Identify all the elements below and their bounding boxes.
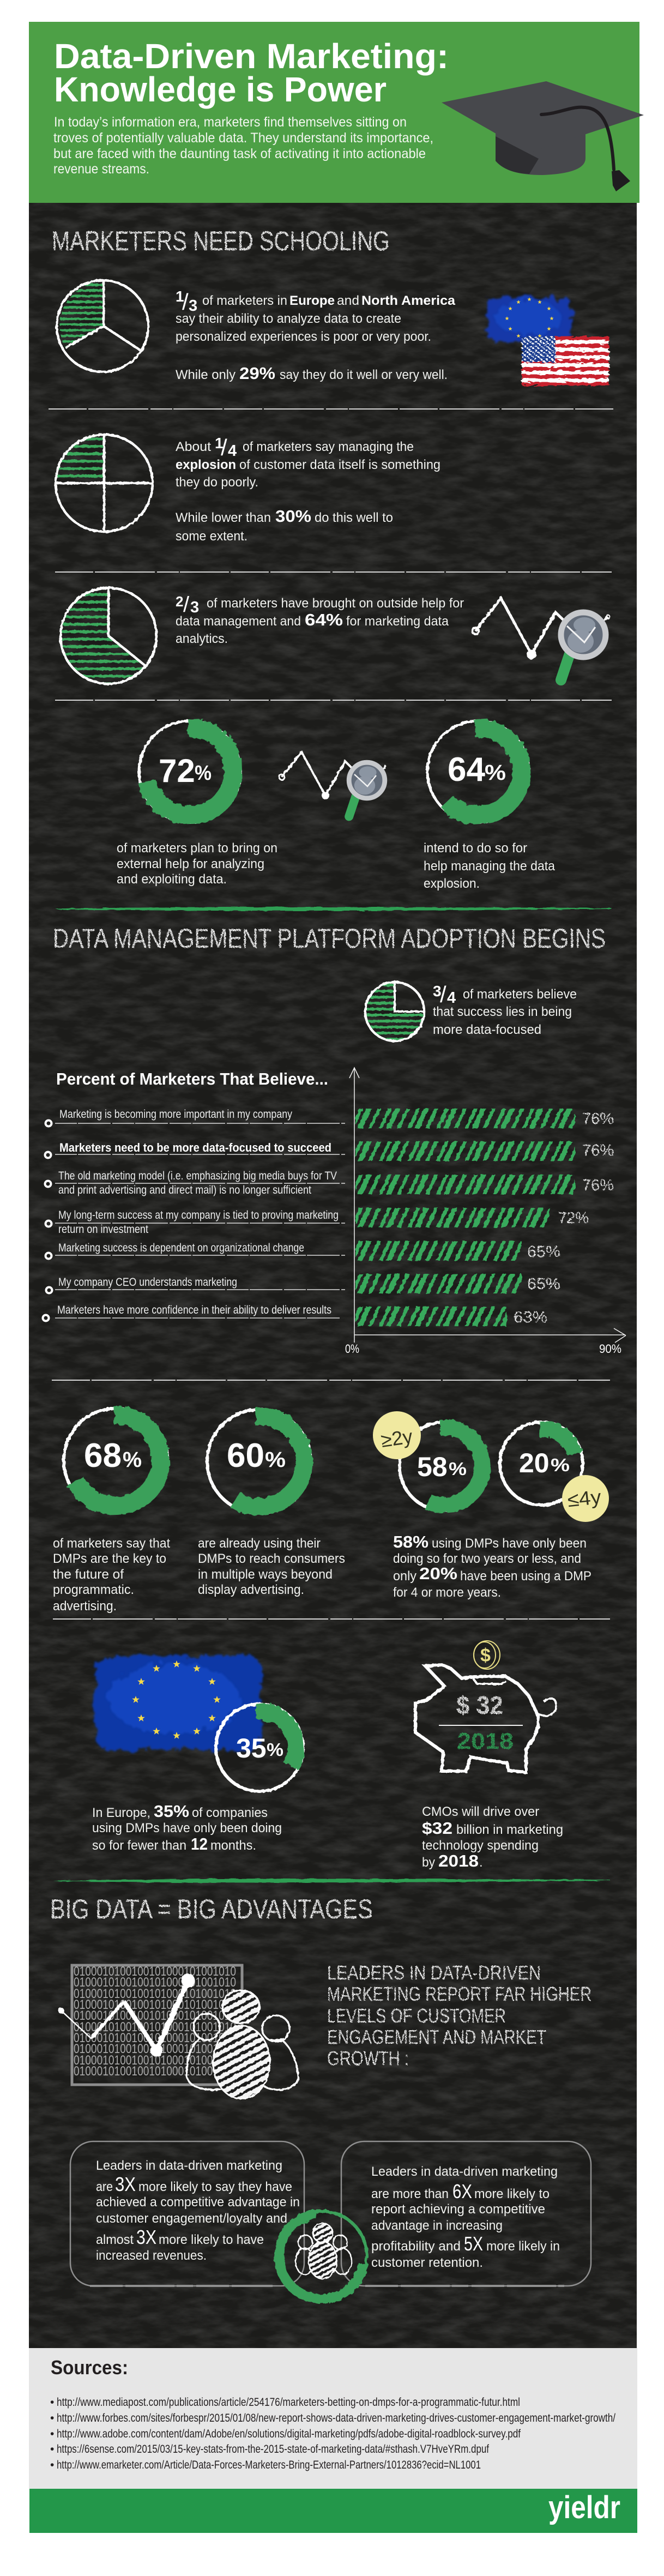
caption: 72 percent: and exploiting data. — [117, 872, 227, 887]
badge: two years — [373, 1411, 421, 1459]
row: old marketing model: The old marketing model (i.e. emphasizing big media buys for TV — [58, 1170, 337, 1182]
caption: CMOs spending — [422, 1804, 563, 1870]
caption: 58 and 20 percent: 20% — [419, 1564, 457, 1583]
axes: 90% — [599, 1342, 621, 1356]
text block: two thirds of marketers: 64% — [305, 610, 343, 629]
caption: Europe 35 percent: 35% — [154, 1802, 189, 1821]
text block: three quarters: that success lies in being — [433, 1004, 572, 1019]
donut: 72 percent — [139, 721, 240, 822]
fraction 1/4: 1 — [215, 435, 224, 452]
text block: one third of marketers: Europe — [289, 293, 335, 308]
row: marketing more important: 76% — [582, 1110, 614, 1128]
row: data focused: Marketers need to be more data-focused to succeed — [59, 1141, 331, 1154]
logo: yieldr: yieldr — [548, 2490, 620, 2525]
row: long-term success: 72% — [558, 1209, 589, 1227]
source list — [50, 2396, 615, 2471]
value: 35 — [236, 1733, 267, 1764]
text block: two thirds of marketers: for marketing data — [346, 614, 449, 629]
caption: 68 percent: the future of — [53, 1567, 124, 1582]
text block: one quarter of marketers: of marketers say managing the — [243, 440, 414, 454]
source list: • — [50, 2443, 54, 2455]
left box text: more likely to have — [159, 2232, 264, 2247]
badge: four years: ≤4y — [566, 1485, 602, 1511]
value: % — [195, 762, 212, 785]
donut: 64 percent — [427, 721, 529, 822]
caption: CMOs spending: CMOs will drive over — [422, 1804, 539, 1819]
text block: one third of marketers: personalized experiences is poor or very poor. — [176, 329, 431, 344]
intro text — [53, 115, 433, 177]
data board — [72, 1964, 242, 2085]
heading: marketers need schooling: MARKETERS NEED SCHOOLING — [52, 226, 390, 256]
donut: 20 percent — [500, 1422, 609, 1522]
row: old marketing model: and print advertising and direct mail) is no longer sufficient — [58, 1184, 311, 1196]
intro text: but are faced with the daunting task of activating it into actionable — [53, 146, 426, 161]
text block: one third of marketers: North America — [361, 293, 456, 308]
donut: 58 percent — [373, 1411, 488, 1510]
caption: 58 and 20 percent: only — [393, 1569, 416, 1584]
left box text: almost — [96, 2232, 134, 2247]
text block: two thirds of marketers: of marketers have brought on outside help for — [207, 596, 464, 611]
callout heading: leaders report: GROWTH : — [327, 2047, 409, 2069]
caption: 64 percent: help managing the data — [424, 859, 556, 874]
text block: one third of marketers: say their ability to analyze data to create — [176, 311, 401, 326]
caption: CMOs spending: 2018 — [438, 1851, 479, 1870]
footer — [29, 2489, 637, 2533]
row: more confidence: 63% — [514, 1309, 547, 1326]
icon: piggy bank — [415, 1641, 556, 1772]
callout heading: leaders report: LEVELS OF CUSTOMER — [327, 2005, 506, 2027]
caption: Europe 35 percent: 12 — [191, 1834, 208, 1853]
row: marketing more important — [46, 1108, 614, 1128]
row: long-term success: return on investment — [58, 1223, 148, 1236]
left box text: customer engagement/loyalty and — [96, 2211, 287, 2226]
value: 58 — [417, 1452, 448, 1482]
badge: four years — [562, 1475, 609, 1522]
source list: • — [50, 2396, 54, 2409]
badge: two years: ≥2y — [379, 1425, 414, 1452]
callout heading: leaders report: LEADERS IN DATA-DRIVEN — [327, 1961, 541, 1984]
intro text: troves of potentially valuable data. They understand its importance, — [53, 130, 433, 146]
value: % — [123, 1448, 142, 1472]
text block: one third of marketers: of marketers in — [202, 293, 287, 308]
caption: 60 percent: DMPs to reach consumers — [198, 1551, 345, 1566]
panel: right advantage box — [341, 2141, 591, 2286]
chalkboard background — [29, 203, 637, 2348]
value: 68 — [84, 1437, 122, 1474]
pie chart: three quarters — [363, 980, 427, 1044]
text block: one third of marketers: say they do it well or very well. — [280, 368, 448, 382]
text block: two thirds of marketers: analytics. — [176, 631, 228, 646]
fraction 2/3: 3 — [190, 599, 199, 616]
right box text: report achieving a competitive — [371, 2202, 545, 2217]
row: marketing more important: Marketing is becoming more important in my company — [59, 1108, 292, 1121]
intro text: revenue streams. — [53, 161, 149, 177]
pie chart: two thirds — [57, 586, 156, 687]
bar chart: percent of marketers that believe — [43, 1068, 626, 1356]
caption: 60 percent: in multiple ways beyond — [198, 1567, 333, 1582]
icon: small line chart with magnifier — [279, 752, 386, 816]
icon: coin — [474, 1641, 500, 1669]
icon: graduation cap — [442, 81, 644, 191]
caption: CMOs spending: $32 — [422, 1819, 452, 1838]
text block: one quarter of marketers: About — [176, 440, 211, 454]
source list: • — [50, 2459, 54, 2471]
caption: 58 and 20 percent: doing so for two years or less, and — [393, 1551, 581, 1566]
caption: CMOs spending: by — [422, 1855, 435, 1870]
panel: sources — [29, 2348, 637, 2489]
caption: 60 percent: display advertising. — [198, 1582, 304, 1597]
title: Knowledge is Power — [54, 70, 387, 109]
text block: one quarter of marketers: explosion — [176, 458, 236, 472]
fraction 3/4: 3 — [433, 983, 442, 1000]
fraction 1/3: 1 — [176, 288, 184, 305]
fraction 1/3: / — [182, 289, 189, 315]
axes: 0% — [345, 1342, 359, 1356]
right box text: advantage in increasing — [371, 2218, 503, 2233]
row: more confidence: Marketers have more confidence in their ability to deliver results — [57, 1304, 331, 1316]
sources heading: Sources: — [51, 2356, 128, 2379]
caption: 72 percent — [117, 841, 277, 887]
left box text — [96, 2158, 300, 2263]
caption: Europe 35 percent — [92, 1802, 282, 1853]
source list: http://www.emarketer.com/Article/Data-Forces-Marketers-Bring-External-Partners/1012836?ecid=NL1001 — [57, 2459, 481, 2471]
pig year: 2018 — [457, 1728, 514, 1754]
caption: Europe 35 percent: so for fewer than — [92, 1838, 186, 1853]
right box text: 6X — [452, 2180, 472, 2202]
illustration: data board and people — [58, 1964, 298, 2102]
intro text: In today’s information era, marketers find themselves sitting on — [54, 115, 407, 130]
donut: 60 percent — [207, 1410, 311, 1513]
title: Data-Driven Marketing: — [54, 37, 449, 76]
caption: 64 percent: intend to do so for — [424, 841, 527, 856]
caption: 68 percent: of marketers say that — [53, 1536, 170, 1551]
caption: 72 percent: external help for analyzing — [117, 857, 264, 871]
text block: one quarter of marketers: 30% — [275, 507, 311, 526]
data board: 0100010100100101000101001010 — [74, 1964, 236, 1979]
left box text: Leaders in data-driven marketing — [96, 2158, 282, 2173]
row: old marketing model: 76% — [582, 1177, 614, 1194]
source list: • — [50, 2412, 54, 2424]
right box text: 5X — [464, 2232, 483, 2255]
value: % — [265, 1448, 286, 1472]
value: % — [485, 761, 506, 785]
row: data focused: 76% — [582, 1142, 614, 1159]
right box text: are more than — [371, 2187, 449, 2201]
right box text: more likely in — [486, 2239, 560, 2254]
row: old marketing model — [45, 1170, 614, 1196]
left box text: increased revenues. — [96, 2248, 207, 2263]
text block: one quarter of marketers: While lower than — [176, 510, 271, 525]
row: organizational change — [46, 1241, 560, 1261]
fraction 3/4: / — [440, 982, 446, 1007]
caption: 64 percent — [424, 841, 556, 891]
caption: 58 and 20 percent: have been using a DMP — [460, 1569, 591, 1584]
row: organizational change: 65% — [527, 1243, 560, 1261]
data board: 0100010100100101000101001010 — [74, 1975, 236, 1990]
caption: 72 percent: of marketers plan to bring on — [117, 841, 277, 856]
left box text: more likely to say they have — [138, 2180, 292, 2194]
pie chart: one third — [55, 278, 148, 372]
pie chart: one quarter — [53, 434, 153, 532]
caption: CMOs spending: . — [479, 1855, 483, 1870]
value: 72 — [159, 753, 195, 789]
caption: 58 and 20 percent: 58% — [393, 1532, 428, 1551]
right box text — [371, 2164, 560, 2270]
text block: two thirds of marketers — [176, 593, 464, 646]
icon: US flag — [522, 336, 609, 386]
row: organizational change: Marketing success is dependent on organizational change — [58, 1242, 304, 1254]
data board: 0100010100100101000101001010 — [74, 2053, 236, 2068]
data board: 0100010100100101000101001010 — [74, 2020, 236, 2035]
pig outline — [415, 1665, 556, 1772]
caption: 60 percent: are already using their — [198, 1536, 321, 1551]
data board: 0100010100100101000101001010 — [74, 2064, 236, 2079]
caption: 64 percent: explosion. — [424, 876, 480, 891]
text block: one quarter of marketers — [176, 435, 440, 544]
panel: left advantage box — [70, 2141, 304, 2286]
fraction 1/4: / — [221, 435, 227, 460]
value: % — [267, 1740, 283, 1760]
text block: three quarters: more data-focused — [433, 1022, 541, 1037]
text block: three quarters — [433, 982, 577, 1037]
callout heading: leaders report: ENGAGEMENT AND MARKET — [327, 2026, 546, 2048]
text block: one third of marketers: While only — [176, 368, 236, 382]
title — [54, 37, 449, 109]
caption: CMOs spending: billion in marketing — [456, 1822, 563, 1837]
row: CEO understands marketing — [46, 1274, 560, 1293]
icon: coin: $ — [480, 1645, 491, 1666]
data board: 0100010100100101000101001010 — [74, 1987, 236, 2001]
caption: Europe 35 percent: In Europe, — [92, 1805, 150, 1820]
caption: 60 percent — [198, 1536, 345, 1597]
text block: two thirds of marketers: data management and — [176, 614, 301, 629]
caption: 68 percent: programmatic. — [53, 1582, 134, 1597]
heading: big data big advantages: BIG DATA = BIG ADVANTAGES — [50, 1894, 373, 1924]
text block: one third of marketers — [176, 288, 456, 383]
text block: one quarter of marketers: some extent. — [176, 529, 248, 544]
caption: Europe 35 percent: of companies — [192, 1805, 268, 1820]
fraction 2/3: / — [183, 593, 190, 617]
fraction 3/4: 4 — [447, 989, 456, 1007]
text block: one quarter of marketers: of customer data itself is something — [239, 458, 440, 472]
axes — [345, 1068, 626, 1356]
caption: 68 percent: DMPs are the key to — [53, 1551, 166, 1566]
text block: one quarter of marketers: they do poorly. — [176, 475, 258, 490]
left box text: are — [96, 2180, 113, 2194]
left box text: 3X — [115, 2173, 136, 2195]
icon: EU flag small — [487, 297, 572, 341]
row: long-term success: My long-term success at my company is tied to proving marketing — [58, 1209, 339, 1221]
value: 64 — [448, 751, 485, 789]
row: data focused — [45, 1141, 614, 1161]
value: 20 — [519, 1448, 550, 1478]
data board: 0100010100100101000101001010 — [74, 2031, 236, 2045]
icon: line chart with magnifier — [472, 598, 609, 680]
caption: Europe 35 percent: using DMPs have only been doing — [92, 1821, 282, 1835]
icon: people in green circle — [273, 2207, 371, 2306]
data board: 0100010100100101000101001010 — [74, 2008, 236, 2023]
row: long-term success — [46, 1208, 589, 1236]
caption: 58 and 20 percent — [393, 1532, 591, 1600]
value: % — [551, 1455, 570, 1475]
chart title: Percent of Marketers That Believe... — [56, 1069, 328, 1088]
pig amount: $ 32 — [456, 1691, 503, 1719]
callout heading: leaders report: MARKETING REPORT FAR HIGHER — [327, 1983, 591, 2005]
row: more confidence — [43, 1304, 547, 1326]
right box text: more likely to — [474, 2187, 550, 2201]
caption: 68 percent: advertising. — [53, 1599, 117, 1614]
right box text: profitability and — [371, 2239, 461, 2254]
source list: http://www.mediapost.com/publications/article/254176/marketers-betting-on-dmps-for-a-programmatic-futur.html — [57, 2396, 520, 2409]
source list: https://6sense.com/2015/03/15-key-stats-from-the-2015-state-of-marketing-data/#sthash.V7HveYRm.dpuf — [57, 2443, 489, 2455]
right box text: Leaders in data-driven marketing — [371, 2164, 558, 2179]
caption: Europe 35 percent: months. — [210, 1838, 256, 1853]
row: CEO understands marketing: 65% — [527, 1275, 560, 1293]
text block: one quarter of marketers: do this well to — [315, 510, 393, 525]
callout heading: leaders report — [327, 1961, 591, 2069]
donut: 35 percent — [216, 1704, 303, 1791]
caption: 58 and 20 percent: for 4 or more years. — [393, 1585, 501, 1600]
text block: three quarters: of marketers believe — [463, 987, 577, 1002]
text block: one third of marketers: 29% — [239, 364, 275, 383]
caption: CMOs spending: technology spending — [422, 1838, 539, 1853]
source list: • — [50, 2428, 54, 2440]
fraction 1/3: 3 — [189, 297, 197, 315]
data board: 0100010100100101000101001010 — [74, 1997, 236, 2012]
source list: http://www.adobe.com/content/dam/Adobe/en/solutions/digital-marketing/pdfs/adobe-digital-roadblock-survey.pdf — [57, 2428, 521, 2440]
value: % — [449, 1459, 467, 1479]
zigzag line — [58, 1974, 195, 2056]
text block: one third of marketers: and — [337, 293, 359, 308]
data board: 0100010100100101000101001010 — [74, 2042, 236, 2056]
left box text: 3X — [136, 2226, 156, 2248]
left box text: achieved a competitive advantage in — [96, 2195, 300, 2210]
value: 60 — [227, 1437, 264, 1474]
row: CEO understands marketing: My company CEO understands marketing — [58, 1276, 237, 1289]
donut: 68 percent — [64, 1409, 167, 1512]
header panel — [29, 22, 644, 203]
fraction 1/4: 4 — [228, 442, 237, 460]
icon: EU flag large — [95, 1656, 261, 1749]
right box text: customer retention. — [371, 2255, 483, 2270]
fraction 2/3: 2 — [176, 593, 183, 610]
caption: 68 percent — [53, 1536, 170, 1614]
people — [187, 1988, 298, 2102]
caption: 58 and 20 percent: using DMPs have only been — [432, 1536, 587, 1551]
